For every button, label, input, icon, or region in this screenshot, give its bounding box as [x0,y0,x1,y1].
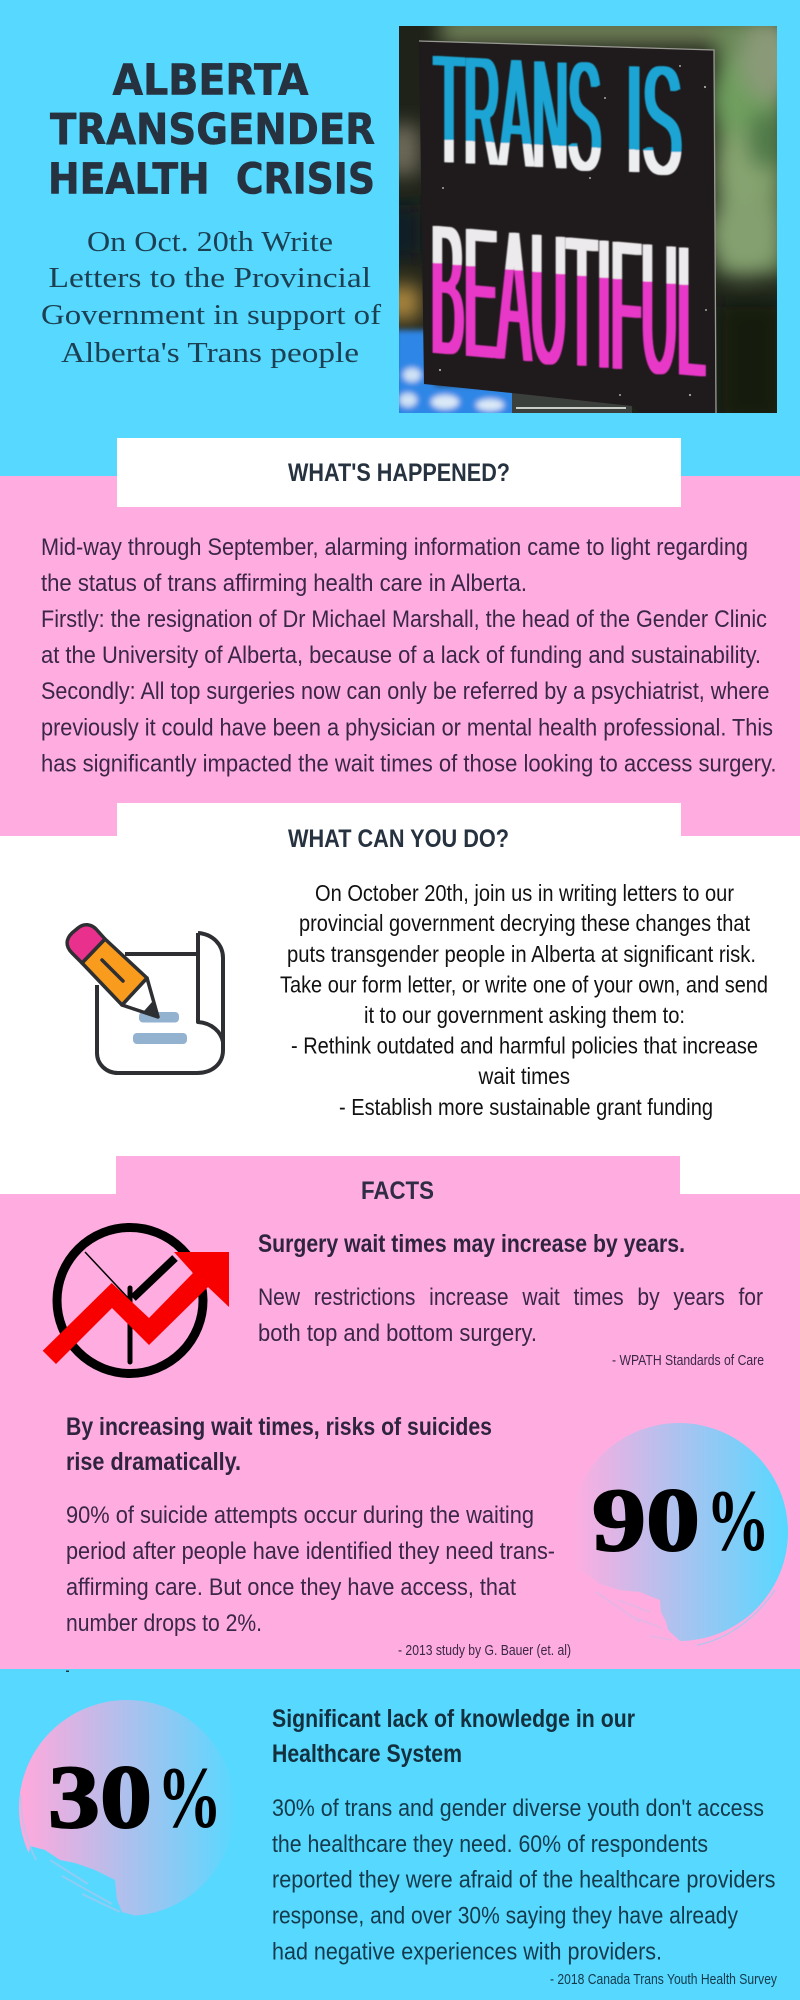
heading tab: what can you do: WHAT CAN YOU DO? [288,825,509,853]
fact: suicide risk: By increasing wait times, risks of suicides [66,1413,492,1441]
text block: what can you do: - Establish more sustainable grant funding [339,1094,713,1120]
panel: healthcare knowledge background [0,1669,800,2000]
stat: 30% brush circle [15,1700,235,1930]
text block: what's happened: the status of trans affirming health care in Alberta. [41,570,527,597]
fact: suicide risk: 90% of suicide attempts occur during the waiting [66,1502,534,1529]
text block: what can you do [280,880,768,1120]
text block: what can you do: wait times [478,1063,570,1089]
fact: surgery wait times: Surgery wait times may increase by years. [258,1230,685,1258]
panel: what can you do background [0,836,800,1194]
fact: surgery wait times [258,1230,764,1369]
fact: lack of knowledge in healthcare: response, and over 30% saying they have already [272,1902,738,1930]
title [48,56,375,204]
icon: pencil writing on paper [67,925,223,1073]
title: HEALTH CRISIS [48,156,375,204]
stray mark [66,1670,69,1672]
heading tab: facts: FACTS [361,1177,434,1205]
text block: what can you do: On October 20th, join us in writing letters to our [315,880,734,906]
fact: lack of knowledge in healthcare: Significant lack of knowledge in our [272,1705,635,1733]
fact: lack of knowledge in healthcare: the healthcare they need. 60% of respondents [272,1831,708,1858]
fact: suicide risk: affirming care. But once they have access, that [66,1574,516,1601]
fact: suicide risk: - 2013 study by G. Bauer (et. al) [398,1642,571,1659]
subtitle [41,226,381,369]
subtitle: Letters to the Provincial [48,262,371,294]
fact: suicide risk: period after people have identified they need trans- [66,1538,555,1565]
fact: lack of knowledge in healthcare: had negative experiences with providers. [272,1938,662,1966]
photo: Trans is Beautiful sign [399,26,777,413]
heading tab: facts [116,1156,680,1205]
stat: 90% brush circle: % [706,1473,770,1570]
fact: suicide risk: rise dramatically. [66,1448,241,1476]
title: ALBERTA [112,56,309,106]
text block: what can you do: it to our government asking them to: [364,1002,685,1028]
subtitle: Government in support of [41,299,381,331]
stat: 90% brush circle [560,1423,788,1650]
heading tab: what can you do [117,803,681,853]
stat: 90% brush circle: 90 [592,1471,700,1570]
stat: 30% brush circle: % [157,1750,222,1847]
photo: Trans is Beautiful sign: IS [626,30,682,210]
text block: what's happened [41,534,776,778]
heading box: what's happened [117,438,681,507]
panel: facts background [0,1194,800,1669]
background: blue top band [0,0,800,476]
fact: surgery wait times: - WPATH Standards of Care [612,1352,764,1369]
subtitle: On Oct. 20th Write [87,226,333,258]
fact: lack of knowledge in healthcare [272,1705,777,1988]
icon: clock with rising red arrow [43,1228,229,1374]
fact: lack of knowledge in healthcare: Healthcare System [272,1740,462,1768]
heading box: what's happened: WHAT'S HAPPENED? [288,459,510,487]
fact: surgery wait times: both top and bottom surgery. [258,1320,537,1347]
text block: what's happened: Mid-way through September, alarming information came to light regarding [41,534,748,561]
subtitle: Alberta's Trans people [61,337,359,369]
title: TRANSGENDER [50,106,375,155]
fact: suicide risk: number drops to 2%. [66,1610,262,1637]
panel: what's happened background [0,476,800,836]
stat: 30% brush circle: 30 [48,1748,152,1847]
fact: suicide risk [66,1413,571,1659]
